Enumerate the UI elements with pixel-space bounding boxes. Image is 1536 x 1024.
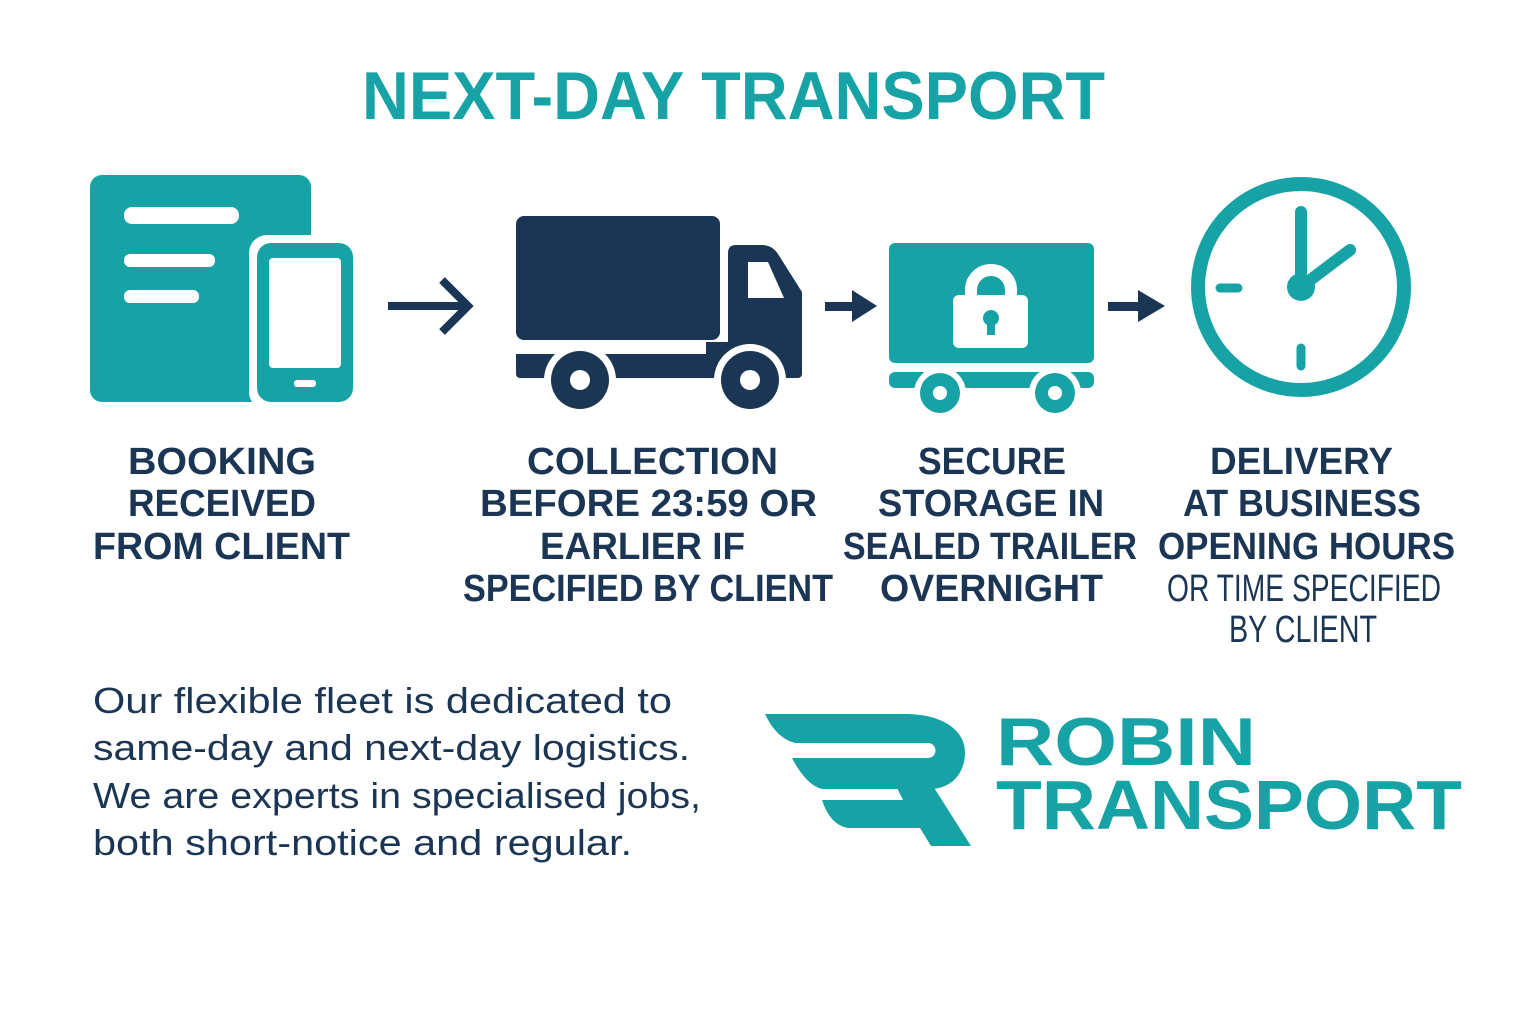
label: secure storage: SEALED TRAILER [843, 526, 1137, 568]
icon: trailer with lock [889, 243, 1094, 419]
text block: fleet description: We are experts in specialised jobs, [93, 775, 701, 816]
label: secure storage: STORAGE IN [878, 483, 1104, 525]
label: collection: SPECIFIED BY CLIENT [463, 568, 833, 610]
arrow 3 [1108, 290, 1165, 322]
label: delivery: DELIVERY [1210, 441, 1393, 483]
label: booking: BOOKING [128, 441, 316, 483]
logo text: ROBIN [996, 704, 1256, 780]
label: booking [93, 441, 350, 568]
label: collection: COLLECTION [527, 441, 778, 483]
logo text: TRANSPORT [996, 766, 1462, 844]
title: NEXT-DAY TRANSPORT [362, 58, 1105, 134]
text block: fleet description: both short-notice and regular. [93, 822, 632, 863]
logo text [996, 704, 1462, 844]
arrow 1 [388, 280, 468, 332]
label: collection: EARLIER IF [540, 526, 745, 568]
label: secure storage [843, 441, 1137, 610]
icon: truck [516, 216, 802, 416]
text block: fleet description: same-day and next-day logistics. [93, 727, 690, 768]
label: delivery: BY CLIENT [1229, 609, 1377, 651]
label: collection: BEFORE 23:59 OR [480, 483, 817, 525]
label: delivery: AT BUSINESS [1183, 483, 1421, 525]
label: secure storage: OVERNIGHT [880, 568, 1103, 610]
text block: fleet description [93, 680, 701, 863]
label: delivery [1158, 441, 1455, 651]
label: booking: FROM CLIENT [93, 526, 350, 568]
arrow 2 [825, 290, 877, 322]
icon: booking document and phone [90, 175, 361, 410]
label: booking: RECEIVED [128, 483, 316, 525]
icon: R mark [765, 714, 971, 846]
label: delivery: OPENING HOURS [1158, 526, 1455, 568]
label: secure storage: SECURE [918, 441, 1066, 483]
logo: Robin Transport [765, 704, 1462, 846]
icon: clock [1198, 184, 1404, 390]
text block: fleet description: Our flexible fleet is dedicated to [93, 680, 672, 721]
label: delivery: OR TIME SPECIFIED [1167, 568, 1441, 610]
label: collection [463, 441, 833, 610]
